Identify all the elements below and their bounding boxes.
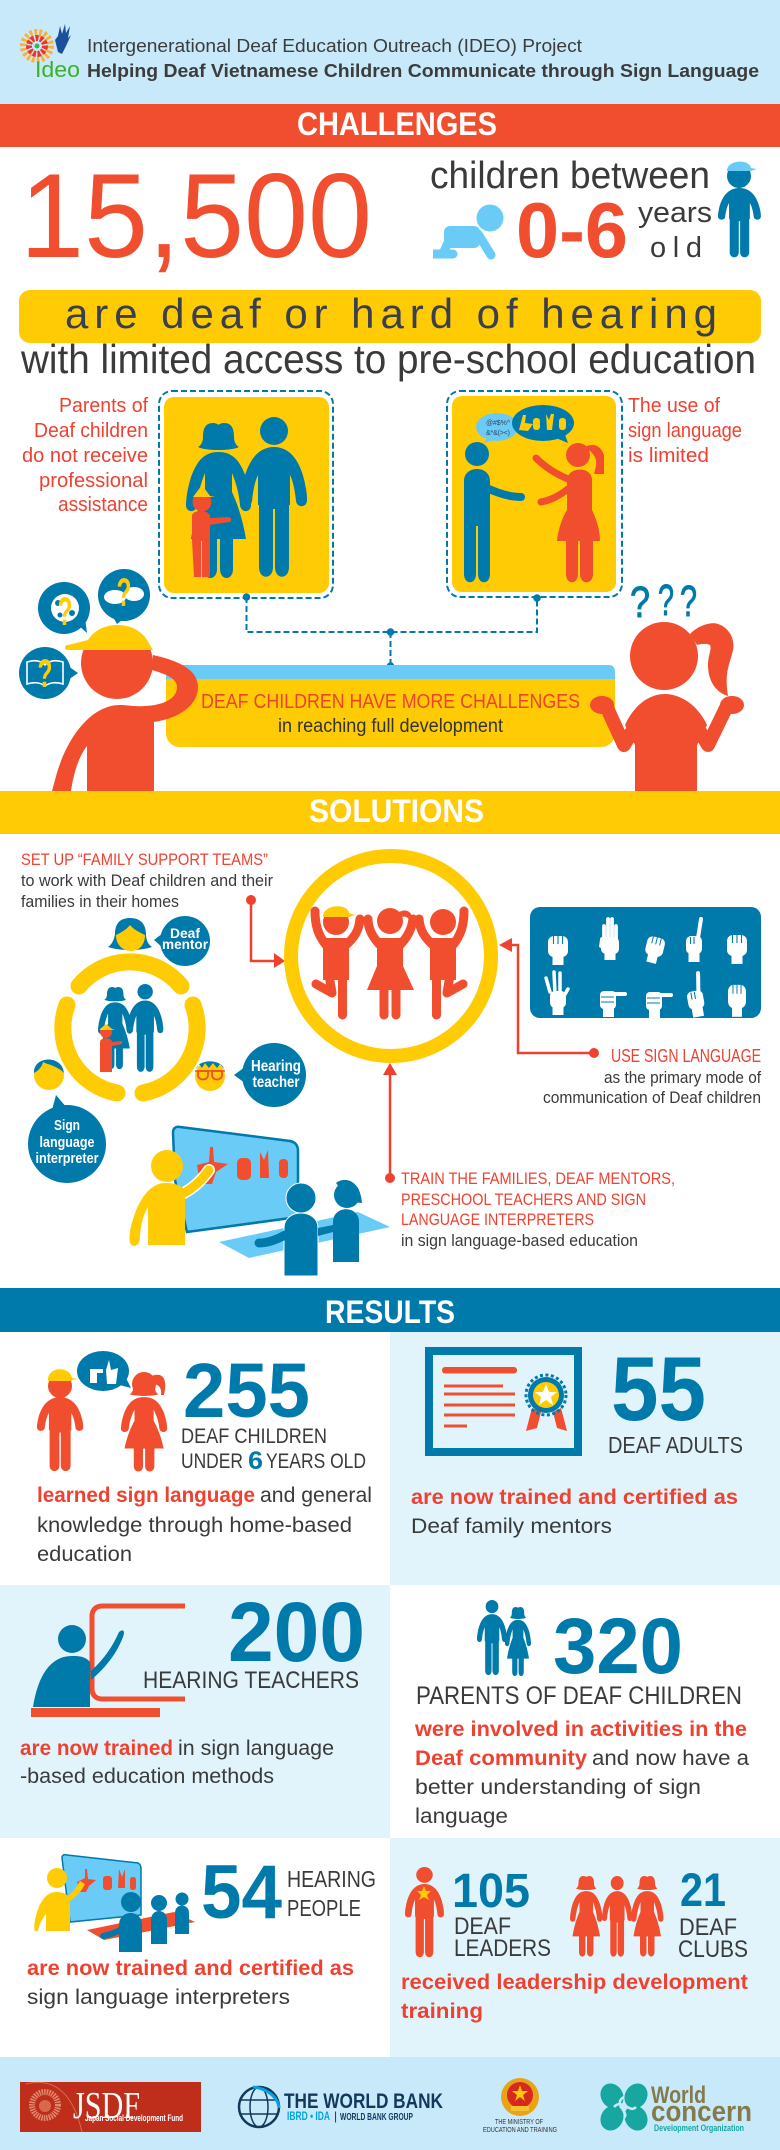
stat: 21: 21 bbox=[680, 1863, 726, 1916]
stat label: DEAF CHILDREN bbox=[181, 1425, 327, 1448]
panel: 55 deaf adults bbox=[390, 1332, 780, 1585]
diagram: family support team bbox=[28, 916, 306, 1183]
stat label bbox=[678, 1914, 748, 1963]
heading band: solutions bbox=[0, 791, 780, 834]
panel: 255 deaf children bbox=[37, 1348, 372, 1566]
icon: deaf mentor: Deaf bbox=[170, 925, 200, 941]
question marks: ? bbox=[680, 577, 697, 626]
text: children between 0-6 years old: children between bbox=[430, 155, 710, 197]
stat label bbox=[287, 1866, 376, 1921]
text: family support teams bbox=[21, 850, 273, 911]
body text bbox=[414, 1718, 749, 1828]
body text bbox=[20, 1737, 334, 1788]
icon: chat question bubble: ? bbox=[116, 571, 132, 615]
text: parents do not receive assistance: do not receive bbox=[22, 445, 148, 467]
icon: teacher at board bbox=[31, 1606, 185, 1717]
icon: Ideo logo bbox=[24, 24, 80, 82]
stat label: UNDER bbox=[181, 1450, 243, 1473]
stat label bbox=[454, 1913, 551, 1962]
heading band: results: RESULTS bbox=[325, 1294, 455, 1330]
arrow: training to children bbox=[383, 1063, 397, 1183]
icon: parents bbox=[477, 1600, 531, 1676]
stat: 200: 200 bbox=[228, 1585, 365, 1679]
icon: hearing teacher: Hearing bbox=[251, 1058, 301, 1075]
callout: deaf children have more challenges: in reaching full development bbox=[278, 716, 504, 737]
stat label: HEARING bbox=[287, 1866, 376, 1892]
body text: are now trained and certified as bbox=[411, 1486, 738, 1509]
arrow: support teams to children bbox=[246, 895, 285, 968]
icon: girl confused bbox=[590, 576, 744, 791]
heading band: challenges: CHALLENGES bbox=[297, 106, 497, 142]
body text: and general bbox=[260, 1484, 372, 1507]
text: children between 0-6 years old: old bbox=[650, 232, 702, 264]
logo: Ministry of Education and Training: THE MINISTRY OF bbox=[495, 2119, 543, 2126]
panel: 320 parents bbox=[414, 1600, 749, 1828]
teacher bbox=[129, 1150, 209, 1246]
logo: World Concern: World bbox=[651, 2082, 706, 2109]
text: use of sign language limited: is limited bbox=[628, 445, 709, 467]
text: children between 0-6 years old: 0-6 bbox=[516, 186, 628, 274]
icon: hearing teacher bbox=[195, 1043, 306, 1107]
stat label: YEARS OLD bbox=[266, 1450, 366, 1473]
icon: football question bubble bbox=[38, 582, 90, 634]
heading band: solutions: SOLUTIONS bbox=[309, 793, 484, 829]
stat: 55: 55 bbox=[611, 1339, 706, 1440]
icon: chat question bubble bbox=[98, 569, 150, 624]
icon: deaf leader bbox=[405, 1867, 444, 1957]
header band bbox=[0, 0, 780, 104]
icon: child bbox=[192, 485, 231, 577]
body text: learned sign language bbox=[37, 1484, 255, 1507]
icon: crawling baby bbox=[433, 204, 504, 255]
stat label: LEADERS bbox=[454, 1935, 551, 1962]
logo: World Concern: Development Organization bbox=[654, 2123, 744, 2134]
icon: boy and girl signing bbox=[37, 1351, 167, 1471]
project name: Intergenerational Deaf Education Outreach (IDEO) Project bbox=[87, 35, 582, 56]
body text: received leadership development bbox=[401, 1971, 748, 1994]
stat label: CLUBS bbox=[678, 1936, 748, 1963]
logo: The World Bank: THE WORLD BANK bbox=[284, 2090, 443, 2113]
icon: classroom bbox=[34, 1855, 195, 1952]
stat: 255: 255 bbox=[183, 1348, 310, 1434]
table bbox=[219, 1212, 390, 1258]
icon: book question bubble: ? bbox=[38, 652, 52, 696]
text: family support teams: SET UP “FAMILY SUPPORT TEAMS” bbox=[21, 850, 268, 869]
icon: left child bbox=[315, 906, 360, 1015]
panel: limited sign language bbox=[447, 391, 622, 597]
stat: 320: 320 bbox=[553, 1601, 683, 1690]
body text: in sign language bbox=[178, 1737, 334, 1760]
text: train the families: LANGUAGE INTERPRETERS bbox=[401, 1210, 594, 1229]
icon: father bbox=[241, 417, 307, 577]
text: children between 0-6 years old bbox=[430, 155, 761, 274]
body text bbox=[401, 1971, 748, 2023]
text: limited access: with limited access to pre-school education bbox=[20, 336, 756, 382]
text: use sign language: communication of Deaf children bbox=[543, 1088, 761, 1107]
text: train the families: TRAIN THE FAMILIES, DEAF MENTORS, bbox=[401, 1169, 675, 1188]
stat label: DEAF bbox=[454, 1913, 511, 1940]
icon: sign language interpreter: Sign bbox=[54, 1117, 80, 1134]
project subtitle: Helping Deaf Vietnamese Children Communicate through Sign Language bbox=[87, 60, 759, 81]
circle: happy children bbox=[291, 856, 491, 1056]
text: parents do not receive assistance: professional bbox=[39, 470, 148, 492]
body text: were involved in activities in the bbox=[414, 1718, 747, 1741]
logo: The World Bank: WORLD BANK GROUP bbox=[340, 2112, 413, 2123]
icon: mother bbox=[186, 423, 251, 578]
text: train the families: in sign language-based education bbox=[401, 1231, 638, 1250]
body text: Deaf community bbox=[415, 1747, 587, 1770]
students bbox=[259, 1180, 362, 1276]
icon: man signing bbox=[464, 442, 521, 582]
stat label: PEOPLE bbox=[287, 1895, 361, 1921]
text: parents do not receive assistance: assistance bbox=[58, 494, 148, 516]
icon: light speech bubble: @#$%^ bbox=[486, 420, 511, 427]
icon: certificate bbox=[429, 1351, 578, 1452]
dashed connector bbox=[243, 593, 541, 670]
heading band: challenges bbox=[0, 104, 780, 147]
text: use of sign language limited: sign language bbox=[628, 420, 742, 442]
icon: Ideo logo: Ideo bbox=[35, 57, 80, 82]
question marks: ? bbox=[630, 578, 650, 627]
stat: 15,500: 15,500 bbox=[20, 149, 372, 283]
panel: 54 hearing people bbox=[27, 1850, 376, 2009]
stat label: DEAF ADULTS bbox=[608, 1432, 743, 1458]
logo: The World Bank bbox=[239, 2087, 443, 2127]
text: use sign language bbox=[543, 1046, 761, 1107]
logo: JSDF bbox=[20, 2082, 201, 2132]
heading band: results bbox=[0, 1288, 780, 1332]
icon: middle child bbox=[367, 908, 414, 1015]
icon: light speech bubble: &*&(><) bbox=[486, 430, 510, 437]
question marks bbox=[630, 576, 697, 627]
body text: language bbox=[415, 1805, 508, 1828]
logo: JSDF: Japan Social Development Fund bbox=[85, 2113, 183, 2124]
text: family support teams: to work with Deaf children and their bbox=[21, 871, 273, 890]
icon: deaf mentor bbox=[108, 916, 210, 966]
text: family support teams: families in their homes bbox=[21, 892, 179, 911]
stat label: HEARING TEACHERS bbox=[143, 1667, 359, 1694]
logo: The World Bank: | bbox=[334, 2109, 337, 2123]
footer: partner logos bbox=[0, 2057, 780, 2150]
logo: World Concern: concern bbox=[651, 2096, 752, 2128]
body text: sign language interpreters bbox=[27, 1986, 290, 2009]
hand signs bbox=[197, 1147, 288, 1184]
logo: JSDF: JSDF bbox=[73, 2085, 140, 2127]
icon: light speech bubble bbox=[476, 413, 518, 443]
panel: family bbox=[159, 391, 333, 598]
icon: sign language interpreter: language bbox=[40, 1134, 94, 1151]
text: train the families bbox=[401, 1169, 675, 1250]
icon: boy thinking bbox=[52, 625, 198, 791]
body text: -based education methods bbox=[20, 1765, 274, 1788]
body text: are now trained bbox=[20, 1737, 173, 1760]
stat label bbox=[181, 1425, 366, 1475]
stat label: PARENTS OF DEAF CHILDREN bbox=[416, 1682, 742, 1710]
body text: are now trained and certified as bbox=[27, 1957, 354, 1980]
highlight: are deaf or hard of hearing: are deaf or hard of hearing bbox=[65, 290, 717, 337]
icon: boy with cap bbox=[718, 162, 761, 257]
body text bbox=[411, 1486, 738, 1538]
logo: Ministry of Education and Training: EDUCATION AND TRAINING bbox=[483, 2127, 557, 2134]
callout: deaf children have more challenges bbox=[166, 665, 615, 747]
icon: hearing teacher: teacher bbox=[252, 1074, 300, 1091]
text: children between 0-6 years old: years bbox=[638, 197, 712, 229]
panel: sign language hands bbox=[530, 907, 761, 1018]
logo: Ministry of Education and Training bbox=[483, 2078, 557, 2134]
logo: The World Bank: IBRD • IDA bbox=[287, 2109, 330, 2123]
icon: sign speech bubble bbox=[512, 405, 574, 443]
text: parents do not receive assistance: Parents of bbox=[59, 395, 148, 417]
icon: sign language interpreter bbox=[28, 1059, 106, 1183]
icon: book question bubble bbox=[19, 647, 78, 699]
icon: deaf mentor: mentor bbox=[162, 936, 209, 952]
illustration: classroom board bbox=[129, 1127, 390, 1276]
icon: club group bbox=[570, 1876, 664, 1957]
yellow ring bbox=[63, 962, 197, 1093]
panel: 105 leaders and 21 clubs bbox=[390, 1838, 780, 2057]
body text: and now have a bbox=[592, 1747, 749, 1770]
callout: deaf children have more challenges: DEAF CHILDREN HAVE MORE CHALLENGES bbox=[201, 691, 580, 713]
body text: better understanding of sign bbox=[415, 1776, 701, 1799]
icon: girl signing bbox=[536, 443, 604, 582]
icon: family bbox=[98, 984, 163, 1072]
stat label: 6 bbox=[248, 1447, 263, 1475]
arrow: sign language to children bbox=[499, 938, 599, 1058]
body text: training bbox=[401, 2000, 483, 2023]
stat label: DEAF bbox=[679, 1914, 737, 1941]
text: parents do not receive assistance bbox=[22, 395, 148, 516]
body text: knowledge through home-based bbox=[37, 1514, 352, 1537]
icon: sign language interpreter: interpreter bbox=[36, 1150, 99, 1167]
text: use of sign language limited bbox=[628, 395, 742, 467]
text: use sign language: as the primary mode of bbox=[604, 1068, 761, 1087]
text: train the families: PRESCHOOL TEACHERS AND SIGN bbox=[401, 1190, 646, 1209]
stat: 54: 54 bbox=[201, 1850, 282, 1935]
body text bbox=[27, 1957, 354, 2009]
body text: Deaf family mentors bbox=[411, 1515, 612, 1538]
text: use of sign language limited: The use of bbox=[628, 395, 720, 417]
panel: 200 hearing teachers bbox=[0, 1585, 390, 1838]
stat: 105: 105 bbox=[452, 1865, 530, 1918]
logo: World Concern bbox=[596, 2079, 752, 2135]
body text: education bbox=[37, 1543, 132, 1566]
question marks: ? bbox=[658, 576, 674, 625]
body text bbox=[37, 1484, 372, 1566]
icon: football question bubble: ? bbox=[58, 590, 72, 634]
text: parents do not receive assistance: Deaf children bbox=[34, 420, 148, 442]
icon: right child bbox=[419, 909, 464, 1015]
